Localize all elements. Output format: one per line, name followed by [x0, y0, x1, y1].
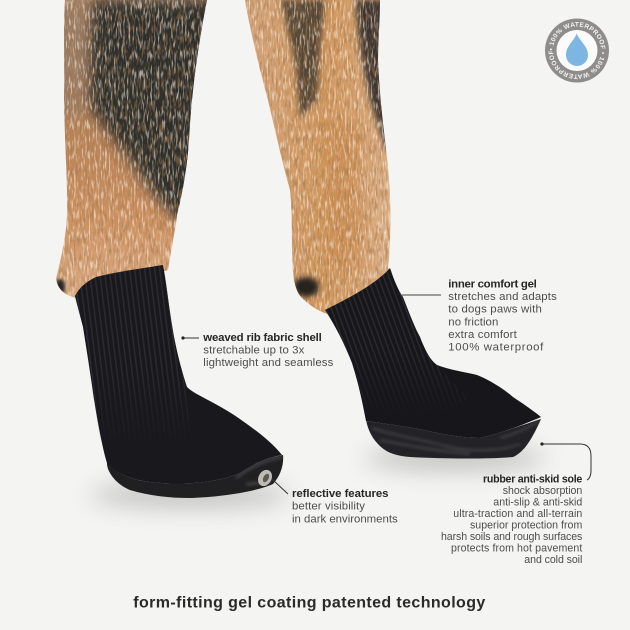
callout text: better visibility — [292, 501, 365, 513]
callout text: no friction — [448, 316, 498, 328]
callout: reflective features: in dark environments — [292, 513, 398, 525]
waterproof badge — [545, 18, 609, 82]
sole highlights — [372, 421, 539, 454]
callout heading: weaved rib fabric shell — [202, 332, 322, 344]
callout text: ultra-traction and all-terrain — [453, 508, 582, 520]
sole highlight — [236, 457, 282, 484]
leader line — [402, 294, 441, 296]
callout text: stretchable up to 3x — [203, 344, 305, 356]
callout: weaved rib fabric shell: lightweight and seamless — [203, 357, 334, 369]
leader dot — [181, 336, 185, 340]
callout text: and cold soil — [524, 554, 582, 566]
photo: right dog leg with fur — [245, 0, 392, 314]
callout heading: reflective features — [292, 488, 388, 500]
callout text — [448, 291, 557, 354]
badge centre — [556, 30, 598, 71]
callout text: to dogs paws with — [448, 304, 542, 316]
callout: inner comfort gel — [402, 278, 557, 354]
reflective button — [255, 467, 275, 489]
photo: left dog leg with fur — [56, 0, 207, 298]
right sock knit body — [325, 268, 541, 438]
left sock sole — [107, 455, 283, 498]
callout text: extra comfort — [448, 329, 518, 341]
callout text: protects from hot pavement — [451, 543, 582, 555]
callout: rubber anti-skid sole — [441, 442, 591, 566]
right sock ribbing — [326, 270, 457, 390]
callout text: stretches and adapts — [448, 291, 557, 303]
callout text — [441, 485, 582, 566]
badge ring — [545, 18, 609, 82]
photo: left sock — [75, 265, 283, 498]
leader line — [183, 337, 199, 339]
callout: reflective features — [273, 480, 398, 525]
callout text: harsh soils and rough surfaces — [441, 531, 582, 543]
callout text: anti-slip & anti-skid — [493, 496, 582, 508]
ground shadows — [90, 446, 545, 507]
callout heading: rubber anti-skid sole — [483, 473, 582, 485]
right sock sole — [366, 419, 541, 458]
callout: weaved rib fabric shell — [181, 332, 334, 369]
footer title: form-fitting gel coating patented technology — [133, 594, 485, 612]
leader line — [273, 480, 288, 494]
curved leader line — [542, 444, 591, 480]
left sock knit body — [75, 265, 282, 484]
badge text: • 100% WATERPROOF • 100% WATERPROOF — [548, 22, 606, 80]
callout text: shock absorption — [503, 485, 582, 497]
leader dot — [540, 442, 544, 446]
photo: right sock — [325, 268, 541, 458]
icon: water drop — [566, 34, 588, 66]
left sock ribbing — [75, 265, 190, 440]
callout heading: inner comfort gel — [448, 278, 537, 290]
callout text: 100% waterproof — [448, 342, 544, 354]
callout text: superior protection from — [470, 520, 582, 532]
